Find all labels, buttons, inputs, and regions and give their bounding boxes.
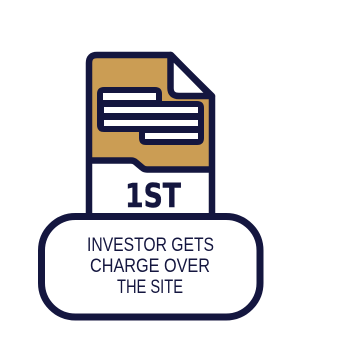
- folded corner: [170, 55, 212, 96]
- label: 1ST: 1ST: [125, 176, 181, 215]
- pill outline: [42, 216, 260, 317]
- gold panel lower edge: [89, 160, 212, 170]
- callout text: [87, 235, 214, 298]
- line three: [104, 120, 198, 126]
- text line 1: INVESTOR GETS: [87, 235, 214, 256]
- icon: document: [89, 55, 212, 225]
- text line 3: THE SITE: [117, 277, 183, 298]
- text line 2: CHARGE OVER: [90, 256, 210, 277]
- navy backing: [97, 87, 204, 145]
- document white body: [89, 55, 212, 225]
- line one: [103, 93, 156, 100]
- callout pill: [42, 216, 260, 317]
- line two: [104, 107, 198, 113]
- line four: [145, 133, 198, 139]
- document gold upper panel: [92, 58, 209, 169]
- document outline: [89, 55, 212, 225]
- text lines block: [97, 87, 204, 145]
